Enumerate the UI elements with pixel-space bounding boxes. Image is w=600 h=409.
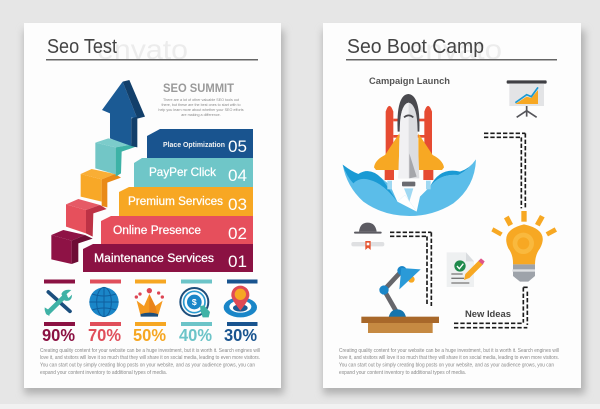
step: teal cube	[95, 138, 136, 177]
bar 05: Place Optimization: 05	[228, 137, 247, 156]
icon: dollar target: $	[192, 297, 197, 307]
icon: wrench and screwdriver	[45, 290, 72, 316]
label: New Ideas: New Ideas	[465, 309, 511, 320]
stat: money target 40%	[179, 280, 212, 345]
stat: money target 40%: 40%	[179, 325, 212, 345]
icon: document with pencil	[447, 252, 485, 287]
watermark: envato	[97, 34, 188, 65]
watermark: envato	[408, 34, 502, 65]
bar 04: PayPer Click	[134, 158, 253, 187]
stat: globe 70%: 70%	[88, 325, 121, 345]
rocket flames	[387, 181, 431, 202]
icon: crown	[135, 288, 164, 317]
bar 02: Online Presence	[101, 216, 253, 244]
body paragraph: expand your content inventory to additional types of media.	[339, 370, 466, 376]
dashed path: board to bulb	[484, 133, 525, 208]
bar 04: PayPer Click: 04	[228, 166, 247, 185]
step: red cube	[66, 199, 107, 237]
icon: graduation cap and diploma	[351, 223, 384, 250]
rocket body	[398, 103, 419, 178]
title: Seo Test: Seo Test	[47, 36, 117, 58]
bar 01: Maintenance Services: 01	[228, 252, 247, 271]
panel: Seo Test poster	[24, 23, 284, 394]
icon: desk lamp	[361, 266, 439, 333]
body paragraph: love it, and visitors will love it so much that they will share it on social media, leading to even more visitors.	[339, 355, 559, 361]
icon: presentation board	[507, 80, 547, 117]
step: maroon cube	[51, 230, 93, 264]
body paragraph	[339, 348, 559, 376]
bar 02: Online Presence: Online Presence	[113, 225, 201, 237]
rocket launch illustration	[343, 94, 476, 216]
bar 03: Premium Services: 03	[228, 195, 247, 214]
bottom strip	[0, 404, 600, 409]
summit description: there, but these are the best ones to start with to	[161, 103, 241, 107]
bar 02: Online Presence: 02	[228, 224, 247, 243]
stat: crown 50%: 50%	[133, 325, 166, 345]
dashed path: bulb to new ideas	[454, 287, 528, 328]
stat: tools 90%: 90%	[42, 325, 75, 345]
panel: Seo Boot Camp poster	[323, 23, 585, 394]
label: Campaign Launch: Campaign Launch	[369, 76, 450, 86]
dark nose	[397, 94, 419, 132]
summit description: help you learn more about whether your SEO efforts	[158, 108, 244, 112]
bar 03: Premium Services: Premium Services	[128, 196, 223, 208]
summit description: There are a lot of other valuable SEO tools out	[163, 98, 239, 102]
bar 01: Maintenance Services	[83, 244, 253, 272]
body paragraph: You can start out by simply creating blog posts on your website, and as your audience grows, you can	[339, 362, 554, 368]
step: orange cube	[81, 169, 121, 207]
body paragraph: You can start out by simply creating blog posts on your website, and as your audience grows, you can	[40, 362, 255, 368]
summit description	[158, 98, 244, 117]
bar 05: Place Optimization: Place Optimization	[163, 140, 225, 149]
staircase arrow	[51, 80, 145, 264]
body paragraph: expand your content inventory to additional types of media.	[40, 370, 167, 376]
bar 01: Maintenance Services: Maintenance Services	[94, 253, 214, 265]
stat: crown 50%	[133, 280, 166, 345]
arrow head	[102, 80, 145, 147]
icon: globe	[89, 287, 119, 317]
smoke cloud	[343, 159, 476, 216]
bar 05: Place Optimization	[147, 129, 253, 158]
body paragraph	[40, 348, 260, 376]
stat: tools 90%	[42, 280, 75, 345]
heading: SEO SUMMIT: SEO SUMMIT	[163, 83, 234, 95]
summit description: are making a difference.	[181, 113, 221, 117]
icon: location pin	[224, 286, 257, 317]
bar 03: Premium Services	[119, 187, 253, 216]
body paragraph: Creating quality content for your website can be a huge investment, but it is worth it. Search engines will	[339, 348, 559, 354]
stat: location pin 30%	[224, 280, 258, 345]
stat: globe 70%	[88, 280, 121, 345]
title underline	[346, 59, 557, 60]
orange wings	[374, 133, 399, 170]
title: Seo Boot Camp: Seo Boot Camp	[347, 36, 484, 58]
body paragraph: Creating quality content for your website can be a huge investment, but it is worth it. Search engines will	[40, 348, 260, 354]
side boosters	[385, 106, 433, 180]
stat: location pin 30%: 30%	[224, 325, 257, 345]
dashed path: cap to lamp	[390, 232, 431, 306]
title underline	[46, 59, 258, 60]
bar 04: PayPer Click: PayPer Click	[149, 165, 217, 179]
body paragraph: love it, and visitors will love it so much that they will share it on social media, leading to even more visitors.	[40, 355, 260, 361]
icon: light bulb	[491, 211, 557, 282]
